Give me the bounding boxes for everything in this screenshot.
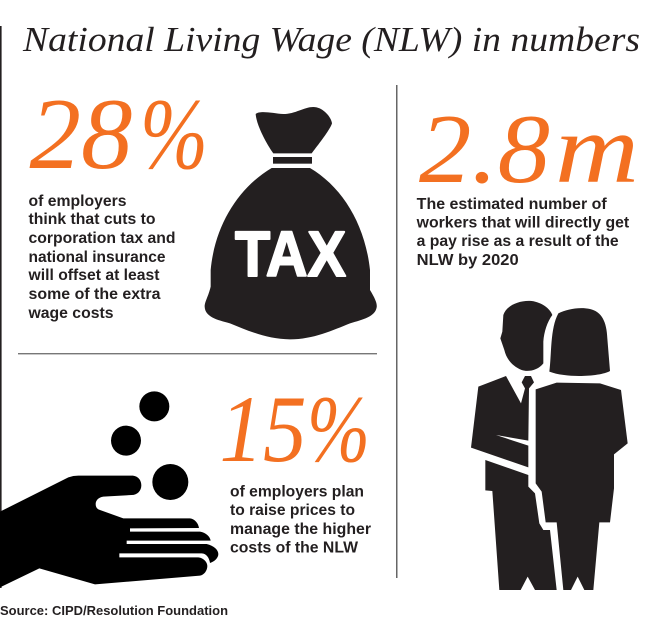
icon: man and woman silhouettes xyxy=(471,301,628,590)
text: 15% description xyxy=(230,484,371,557)
title: National Living Wage (NLW) in numbers xyxy=(22,20,640,59)
icon: hand with falling coins xyxy=(0,391,218,587)
text: 28% description: national insurance xyxy=(28,249,166,266)
text: 28% description: corporation tax and xyxy=(28,230,176,247)
panel: 2.8m stat xyxy=(416,95,639,269)
text: 15% description: to raise prices to xyxy=(230,502,355,519)
text: 28% description: will offset at least xyxy=(27,267,159,284)
stat: 2.8m: 2.8 xyxy=(419,95,550,204)
stat: 28%: 28 xyxy=(30,78,132,191)
text: 2.8m description: NLW by 2020 xyxy=(417,252,519,269)
text: 15% description: manage the higher xyxy=(230,521,371,538)
text: 15% description: costs of the NLW xyxy=(230,540,358,557)
text: 2.8m description: a pay rise as a result of the xyxy=(417,233,619,250)
text: 15% description: of employers plan xyxy=(230,484,364,501)
text: 28% description: think that cuts to xyxy=(28,211,156,228)
panel: 28% stat xyxy=(27,78,208,322)
stat: 28%: % xyxy=(140,78,208,191)
text: 28% description: of employers xyxy=(28,193,126,210)
stat: 15%: 15 xyxy=(220,376,306,482)
panel: 15% stat xyxy=(220,376,371,557)
icon: tax money bag xyxy=(205,107,377,339)
stat: 15%: % xyxy=(307,376,370,482)
text: 28% description xyxy=(27,193,175,322)
icon: tax money bag: TAX xyxy=(235,218,346,290)
text: 28% description: some of the extra xyxy=(28,286,161,303)
source note: Source: CIPD/Resolution Foundation xyxy=(0,603,228,618)
text: 2.8m description xyxy=(416,196,629,269)
stat: 2.8m: m xyxy=(555,95,639,204)
text: 2.8m description: The estimated number of xyxy=(417,196,608,213)
text: 28% description: wage costs xyxy=(27,305,114,322)
text: 2.8m description: workers that will directly get xyxy=(416,214,629,232)
